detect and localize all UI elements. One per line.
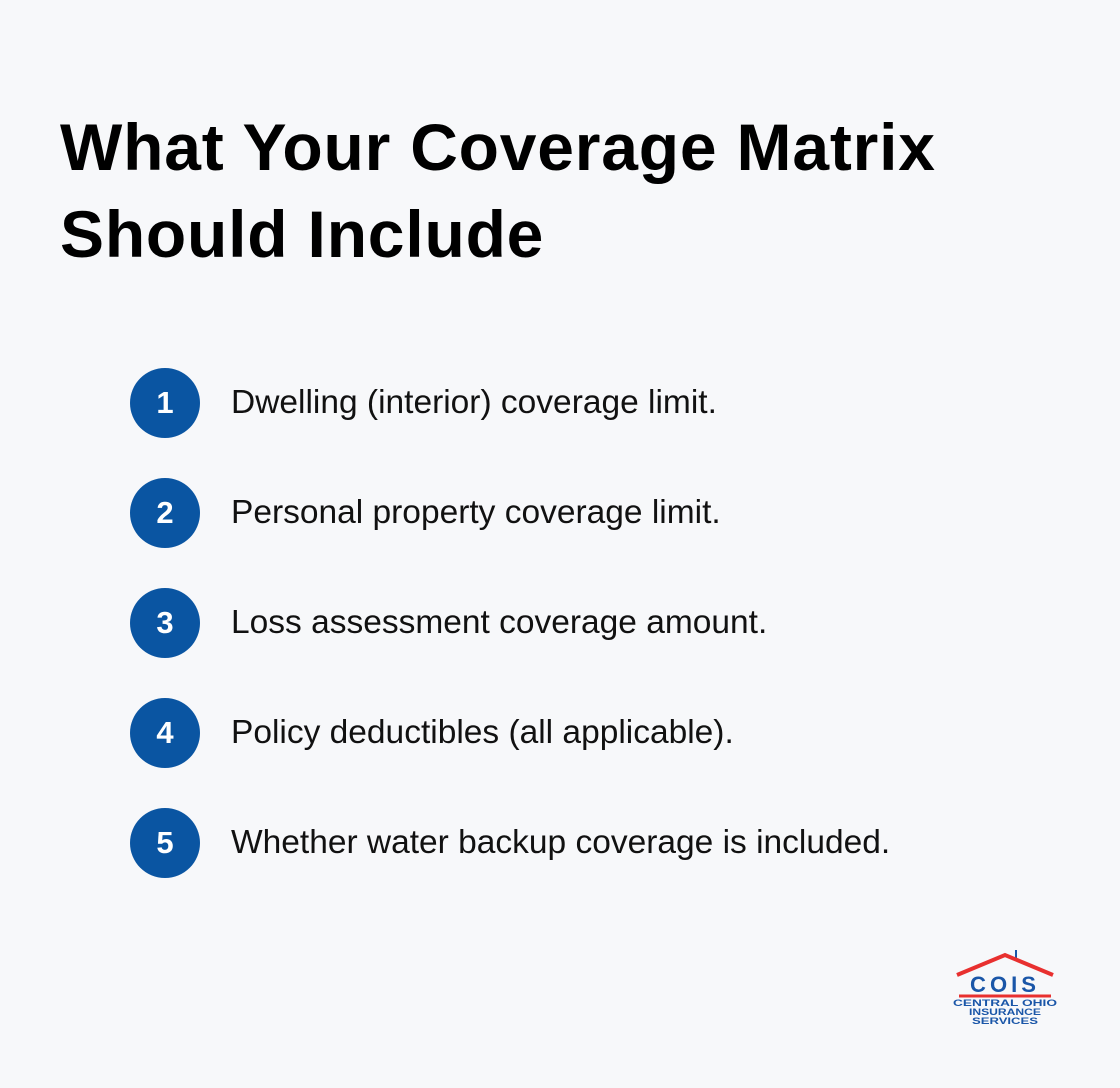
item 3: 3 <box>156 605 174 640</box>
title <box>60 110 936 271</box>
item 4: Policy deductibles (all applicable). <box>231 714 734 751</box>
item 2: Personal property coverage limit. <box>231 494 721 531</box>
item 2: 2 <box>156 495 174 530</box>
title: Should Include <box>60 197 544 271</box>
item 4 <box>130 698 734 768</box>
item 1 <box>130 368 717 438</box>
logo: INSURANCE <box>969 1007 1041 1017</box>
item 3: Loss assessment coverage amount. <box>231 604 767 641</box>
logo: SERVICES <box>972 1016 1038 1026</box>
item 5: 5 <box>156 825 174 860</box>
logo: COIS <box>970 972 1040 997</box>
item 5 <box>130 808 890 878</box>
logo: CENTRAL OHIO <box>953 998 1057 1008</box>
title: What Your Coverage Matrix <box>60 110 936 184</box>
logo <box>953 950 1057 1026</box>
item 1: 1 <box>156 385 174 420</box>
item 5: Whether water backup coverage is included. <box>231 824 890 861</box>
item 2 <box>130 478 721 548</box>
item 1: Dwelling (interior) coverage limit. <box>231 384 717 421</box>
item 4: 4 <box>156 715 174 750</box>
item 3 <box>130 588 767 658</box>
